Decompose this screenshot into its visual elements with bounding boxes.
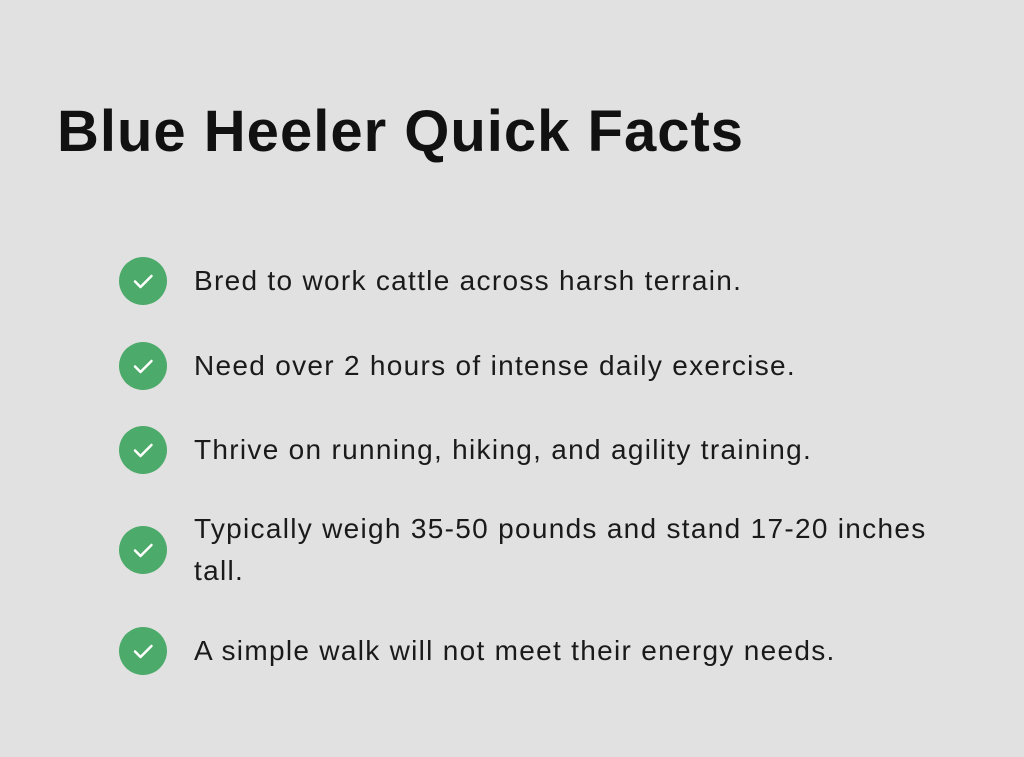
item 5 — [119, 627, 836, 675]
item 1 — [119, 257, 742, 305]
text: Typically weigh 35-50 pounds and stand 17-20 inches — [194, 513, 927, 544]
item 2 — [119, 342, 796, 390]
text: tall. — [194, 555, 244, 586]
icon: check — [119, 526, 167, 574]
text — [194, 513, 927, 586]
item 4 — [119, 513, 927, 586]
text: Bred to work cattle across harsh terrain. — [194, 265, 742, 296]
icon: check — [119, 627, 167, 675]
text: Need over 2 hours of intense daily exercise. — [194, 350, 796, 381]
title: Blue Heeler Quick Facts — [57, 99, 744, 164]
text: A simple walk will not meet their energy needs. — [194, 635, 836, 666]
text: Thrive on running, hiking, and agility training. — [194, 434, 812, 465]
item 3 — [119, 426, 812, 474]
icon: check — [119, 342, 167, 390]
icon: check — [119, 257, 167, 305]
icon: check — [119, 426, 167, 474]
